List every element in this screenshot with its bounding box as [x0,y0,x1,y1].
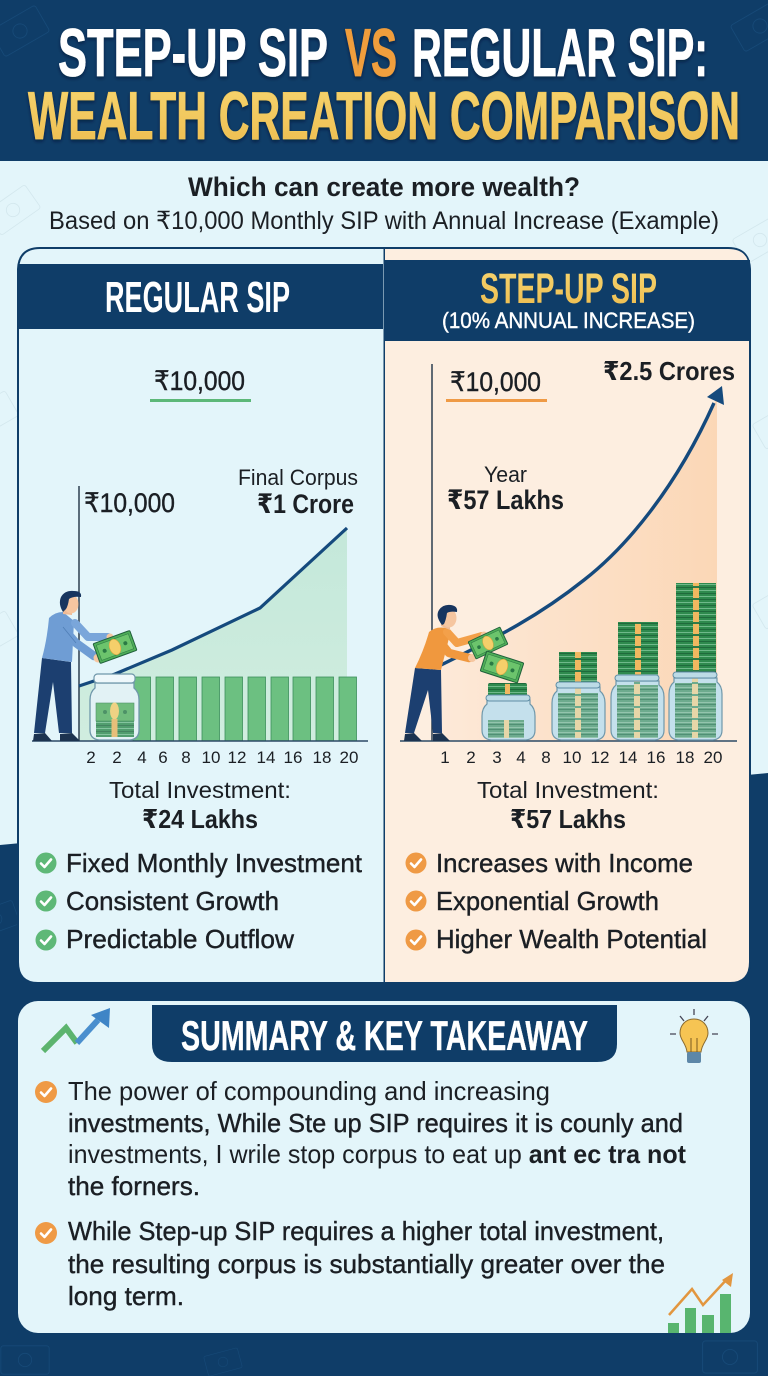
axis years [440,748,722,767]
step-up chart [400,356,737,767]
takeaway 2: While Step-up SIP requires a higher total investment, [68,1216,664,1246]
chart labels: ₹1 Crore [257,489,354,519]
regular benefits: Consistent Growth [66,886,279,916]
growth arrow [441,386,724,665]
monthly amount: ₹10,000 [154,366,245,396]
step-up header: (10% ANNUAL INCREASE) [442,308,695,333]
panel: summary [18,1001,750,1333]
takeaway 1: investments, While Ste up SIP requires it is counly and [68,1108,683,1138]
icon: growth arrow [43,1008,110,1051]
axis years: 12 [228,748,246,767]
axis years: 18 [676,748,694,767]
regular benefits: Predictable Outflow [66,924,294,954]
axis years: 6 [158,748,168,767]
title: STEP-UP SIP [58,15,328,91]
person with cash [404,605,524,741]
step-up monthly amount: ₹10,000 [450,367,541,397]
icon: light bulb [670,1009,718,1063]
total investment: ₹24 Lakhs [142,804,258,834]
title: VS [345,15,397,91]
panel: regular SIP [18,249,384,982]
title [28,15,740,154]
axis years: 20 [704,748,722,767]
panel: step-up SIP [385,249,750,982]
chart labels: Year [484,462,527,487]
chart labels: Final Corpus [238,465,358,490]
axis years: 10 [202,748,220,767]
jar 4 [669,583,722,740]
step-up header: STEP-UP SIP [480,265,657,313]
axis years: 8 [541,748,551,767]
regular header [18,264,383,329]
jar 2 [552,652,605,740]
comparison panel [17,247,751,983]
summary heading: SUMMARY & KEY TAKEAWAY [181,1012,588,1059]
step-up benefits: Higher Wealth Potential [436,924,707,954]
chart labels: ₹57 Lakhs [447,485,564,515]
regular SIP chart [32,465,368,767]
regular header: REGULAR SIP [105,273,290,322]
step-up header [385,260,750,341]
total investment: ₹57 Lakhs [510,804,626,834]
axis years: 20 [340,748,358,767]
takeaway 1: the forners. [68,1171,200,1201]
subheading [49,172,719,235]
axis years: 2 [112,748,122,767]
axis years [86,748,358,767]
axis years: 1 [440,748,450,767]
chart labels [447,356,735,515]
step-up benefits: Increases with Income [436,848,693,878]
regular benefits: Fixed Monthly Investment [66,848,363,878]
jar 1 [482,683,535,740]
subheading: Based on ₹10,000 Monthly SIP with Annual Increase (Example) [49,207,719,235]
bars [133,677,356,741]
chart labels: ₹2.5 Crores [603,356,735,386]
takeaway 2: long term. [68,1281,184,1311]
axis years: 2 [86,748,96,767]
takeaway 2 [35,1216,665,1311]
summary heading [152,1005,617,1062]
total investment [109,777,291,834]
takeaway 1: The power of compounding and increasing [68,1076,550,1106]
axis years: 16 [647,748,665,767]
regular benefits [36,848,363,954]
total investment [477,777,659,834]
takeaway 1 [35,1076,686,1201]
axis years: 10 [563,748,581,767]
step-up benefits [406,848,707,954]
axis years: 4 [137,748,147,767]
step-up benefits: Exponential Growth [436,886,659,916]
axis years: 8 [181,748,191,767]
axis years: 2 [466,748,476,767]
axis years: 16 [284,748,302,767]
icon: bar chart with arrow [668,1273,733,1333]
axis years: 3 [492,748,502,767]
person with cash [33,591,137,741]
chart labels [84,465,358,519]
growth line [79,528,347,686]
axis years: 14 [619,748,637,767]
axis years: 18 [313,748,331,767]
jar 3 [611,622,664,740]
subheading: Which can create more wealth? [188,172,580,202]
takeaway 1: investments, I wrile stop corpus to eat up ant ec tra not [68,1139,686,1169]
chart labels: ₹10,000 [84,488,175,518]
axis years: 14 [257,748,275,767]
axis years: 12 [591,748,609,767]
total investment: Total Investment: [477,777,659,803]
takeaway 2: the resulting corpus is substantially greater over the [68,1249,665,1279]
total investment: Total Investment: [109,777,291,803]
jar with cash [90,674,139,740]
axis years: 4 [516,748,526,767]
